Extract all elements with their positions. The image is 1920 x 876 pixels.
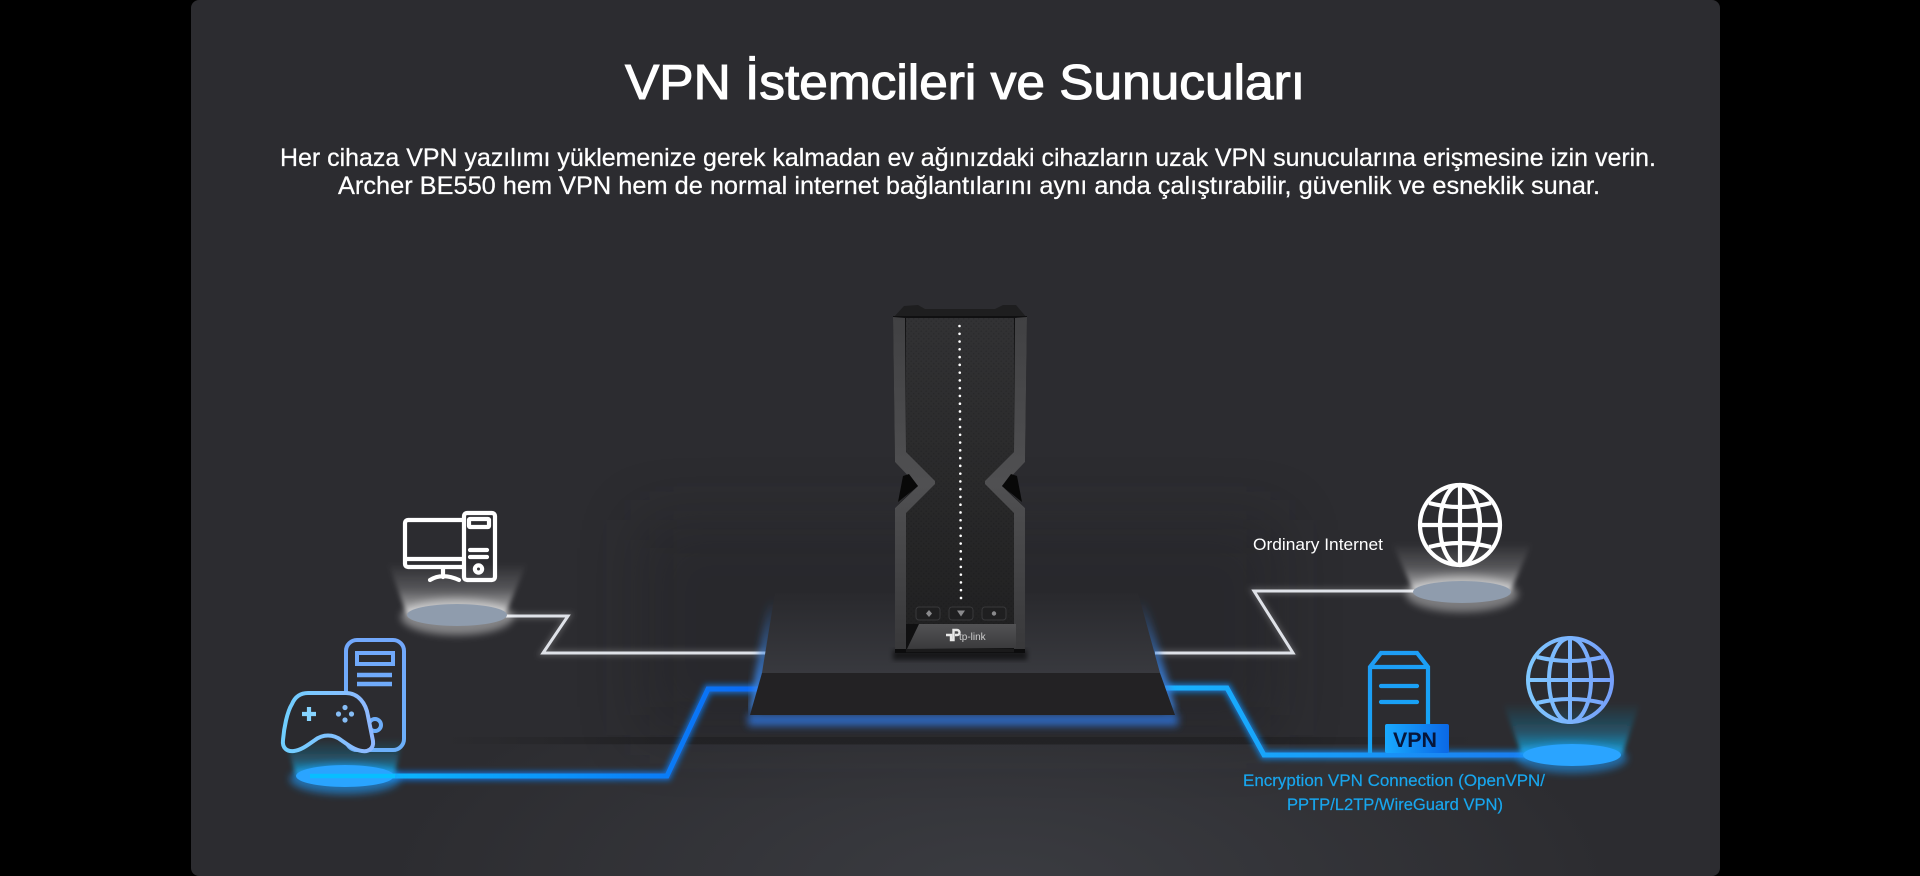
icon: computer and tower bbox=[405, 513, 495, 580]
white connection line right bbox=[1155, 591, 1416, 653]
blue light cone bbox=[1503, 703, 1640, 755]
disc glow bbox=[1517, 743, 1627, 773]
node: ordinary internet globe bbox=[1392, 485, 1532, 612]
button glyphs bbox=[926, 610, 996, 617]
disc line core bbox=[310, 774, 395, 778]
disc bbox=[407, 604, 507, 626]
disc bbox=[1523, 744, 1621, 766]
icon: white globe bbox=[1420, 485, 1500, 565]
router front panel bbox=[906, 318, 1014, 624]
wall shading behind the router bbox=[640, 520, 1280, 735]
blue connection line right bbox=[1165, 688, 1530, 755]
pedestal bbox=[748, 593, 1178, 726]
router dark body bbox=[893, 316, 1027, 653]
icon: console tower bbox=[346, 640, 404, 750]
pedestal right glow bbox=[1140, 600, 1171, 712]
description text: Her cihaza VPN yazılımı yüklemenize gerek kalmadan ev ağınızdaki cihazların uzak VPN sunucularına erişmesine izin verin. bbox=[280, 144, 1656, 172]
floor sheen bbox=[400, 745, 1600, 876]
router feet bbox=[895, 649, 1025, 653]
router buttons bbox=[916, 607, 1006, 620]
router notch right bbox=[1002, 474, 1022, 502]
tp-link logo: tp-link bbox=[959, 632, 987, 643]
node: game console and gamepad bbox=[283, 640, 404, 794]
pedestal top face bbox=[762, 593, 1160, 673]
label: encryption VPN connection: PPTP/L2TP/WireGuard VPN) bbox=[1287, 795, 1503, 814]
router LED dots bbox=[960, 326, 961, 598]
icon: blue globe bbox=[1528, 638, 1612, 722]
disc bbox=[1413, 581, 1511, 603]
router bbox=[893, 305, 1027, 660]
node: VPN server bbox=[1370, 653, 1449, 753]
disc glow bbox=[401, 599, 513, 635]
label: ordinary internet: Ordinary Internet bbox=[1253, 535, 1383, 554]
icon: gamepad bbox=[283, 693, 373, 751]
disc glow bbox=[290, 764, 400, 794]
router left band bbox=[893, 317, 935, 652]
label: encryption VPN connection bbox=[1243, 771, 1545, 814]
disc bbox=[296, 765, 394, 787]
router logo plate bbox=[907, 624, 1016, 649]
title: VPN İstemcileri ve Sunucuları bbox=[625, 56, 1305, 110]
white light cone bbox=[1392, 543, 1532, 592]
description text: Archer BE550 hem VPN hem de normal internet bağlantılarını aynı anda çalıştırabilir, güvenlik ve esneklik sunar. bbox=[338, 172, 1600, 200]
white light cone bbox=[388, 563, 527, 615]
node: desktop computer bbox=[388, 513, 527, 635]
router notch left bbox=[898, 474, 918, 502]
pedestal bottom glow bbox=[748, 714, 1178, 726]
pedestal front face bbox=[750, 673, 1175, 715]
tp-link logo bbox=[946, 630, 987, 643]
disc glow bbox=[1406, 576, 1518, 612]
description text bbox=[280, 144, 1656, 200]
node: encrypted VPN globe bbox=[1503, 638, 1640, 773]
router shadow bbox=[893, 650, 1027, 660]
VPN badge: VPN bbox=[1393, 729, 1437, 752]
blue light cone bbox=[285, 738, 403, 776]
panel: dark background bbox=[191, 0, 1720, 876]
floor strip bbox=[440, 737, 1480, 744]
router top cap bbox=[893, 305, 1027, 320]
pedestal left glow bbox=[754, 600, 773, 712]
blue connection line left bbox=[345, 689, 760, 776]
icon: server bbox=[1370, 653, 1428, 753]
label: encryption VPN connection: Encryption VPN Connection (OpenVPN/ bbox=[1243, 771, 1545, 790]
router right band bbox=[985, 317, 1027, 652]
white connection line left bbox=[505, 616, 768, 653]
